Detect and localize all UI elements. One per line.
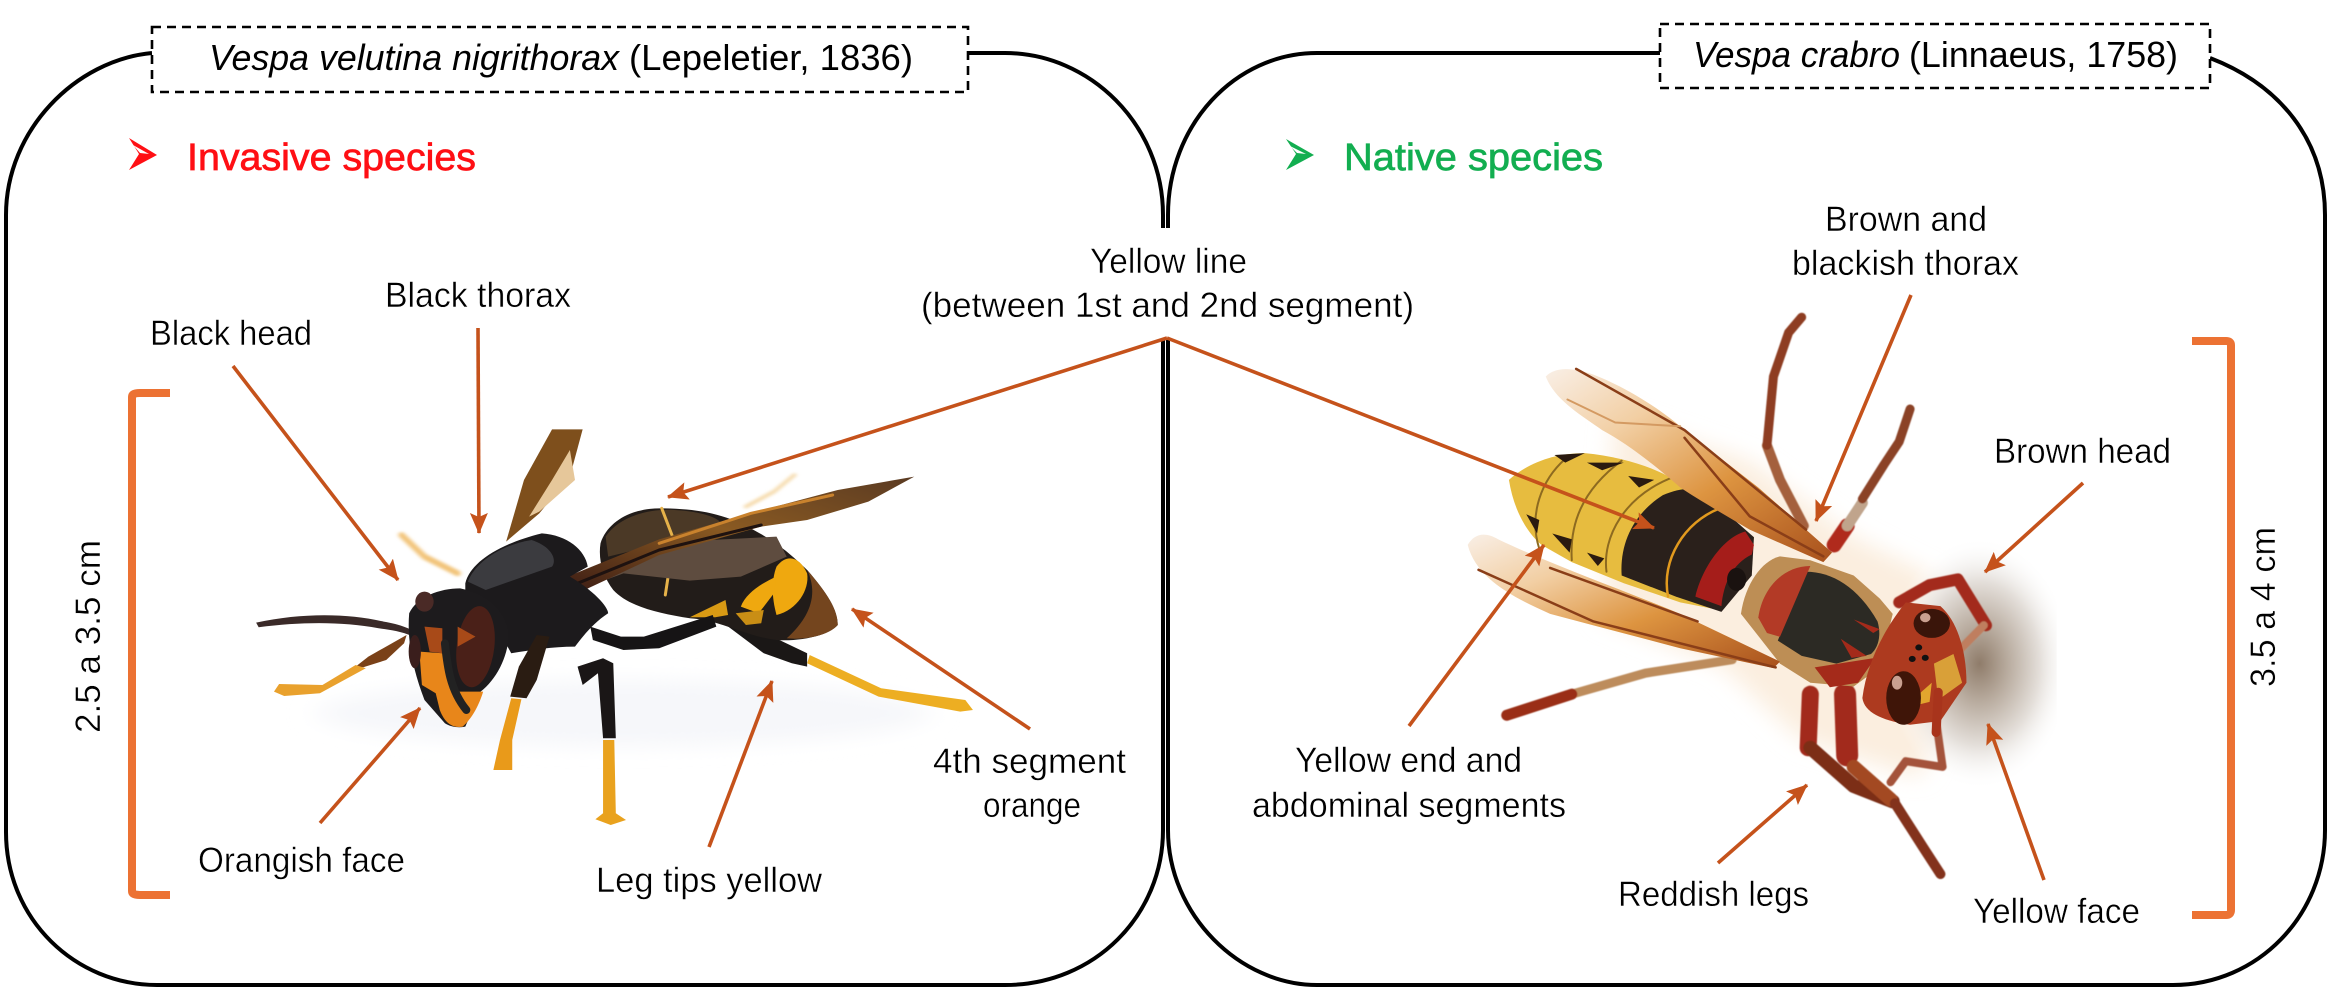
label: orangish face: Orangish face [198,841,405,880]
label: brown and blackish thorax: Brown and [1825,200,1987,239]
label: reddish legs: Reddish legs [1618,875,1809,914]
label: shared yellow line: Yellow line [1090,242,1247,281]
label: 4th segment orange: 4th segment [933,742,1126,781]
heading: native species: Native species [1344,137,1603,179]
arrow: yellow line, native hornet [1167,338,1654,528]
arrow: yellow face [1988,724,2044,880]
label: shared yellow line [921,242,1414,325]
title: invasive species name: (Lepeletier, 1836) [629,37,913,78]
arrow: orangish face [320,708,420,823]
title: invasive species name [152,27,968,92]
label: yellow end and abdominal segments [1252,741,1566,825]
label: black head: Black head [150,314,312,353]
gap in the central divider behind the shared label [1150,228,1190,340]
arrow: leg tips yellow [709,681,772,847]
illustration: Asian hornet [256,429,973,825]
panel: invasive species outline [6,53,1163,985]
title: native species name [1660,24,2210,88]
bracket: native hornet size [2192,341,2231,915]
label: yellow face: Yellow face [1973,892,2140,931]
title: native species name: (Linnaeus, 1758) [1909,34,2178,75]
arrow: yellow line, invasive hornet [668,338,1167,497]
label: 4th segment orange: orange [983,786,1081,825]
label: black thorax: Black thorax [385,276,571,315]
label: 4th segment orange [933,742,1126,825]
title: invasive species name: Vespa velutina nigrithorax [209,37,621,78]
size label: invasive hornet: 2.5 a 3.5 cm [69,540,108,733]
title: native species name: Vespa crabro [1693,34,1900,75]
label: brown head: Brown head [1994,432,2171,471]
label: leg tips yellow: Leg tips yellow [596,861,823,900]
panel: native species outline [1168,53,2325,985]
label: brown and blackish thorax [1792,200,2019,283]
label: brown and blackish thorax: blackish thorax [1792,244,2019,283]
illustration: European hornet [1468,317,2073,874]
arrow: brown head [1985,483,2083,572]
arrow: yellow end [1409,545,1544,726]
arrow: black thorax [478,328,479,533]
label: yellow end and abdominal segments: Yellow end and [1295,741,1522,780]
heading: invasive species: Invasive species [187,137,476,179]
label: yellow end and abdominal segments: abdominal segments [1252,786,1566,825]
arrow: brown thorax [1816,295,1911,521]
arrow: 4th segment orange [852,609,1030,729]
arrow: reddish legs [1718,785,1807,863]
size label: native hornet: 3.5 a 4 cm [2244,527,2283,687]
label: shared yellow line: (between 1st and 2nd segment) [921,286,1414,325]
bracket: invasive hornet size [132,393,170,895]
arrow: black head [233,366,398,580]
